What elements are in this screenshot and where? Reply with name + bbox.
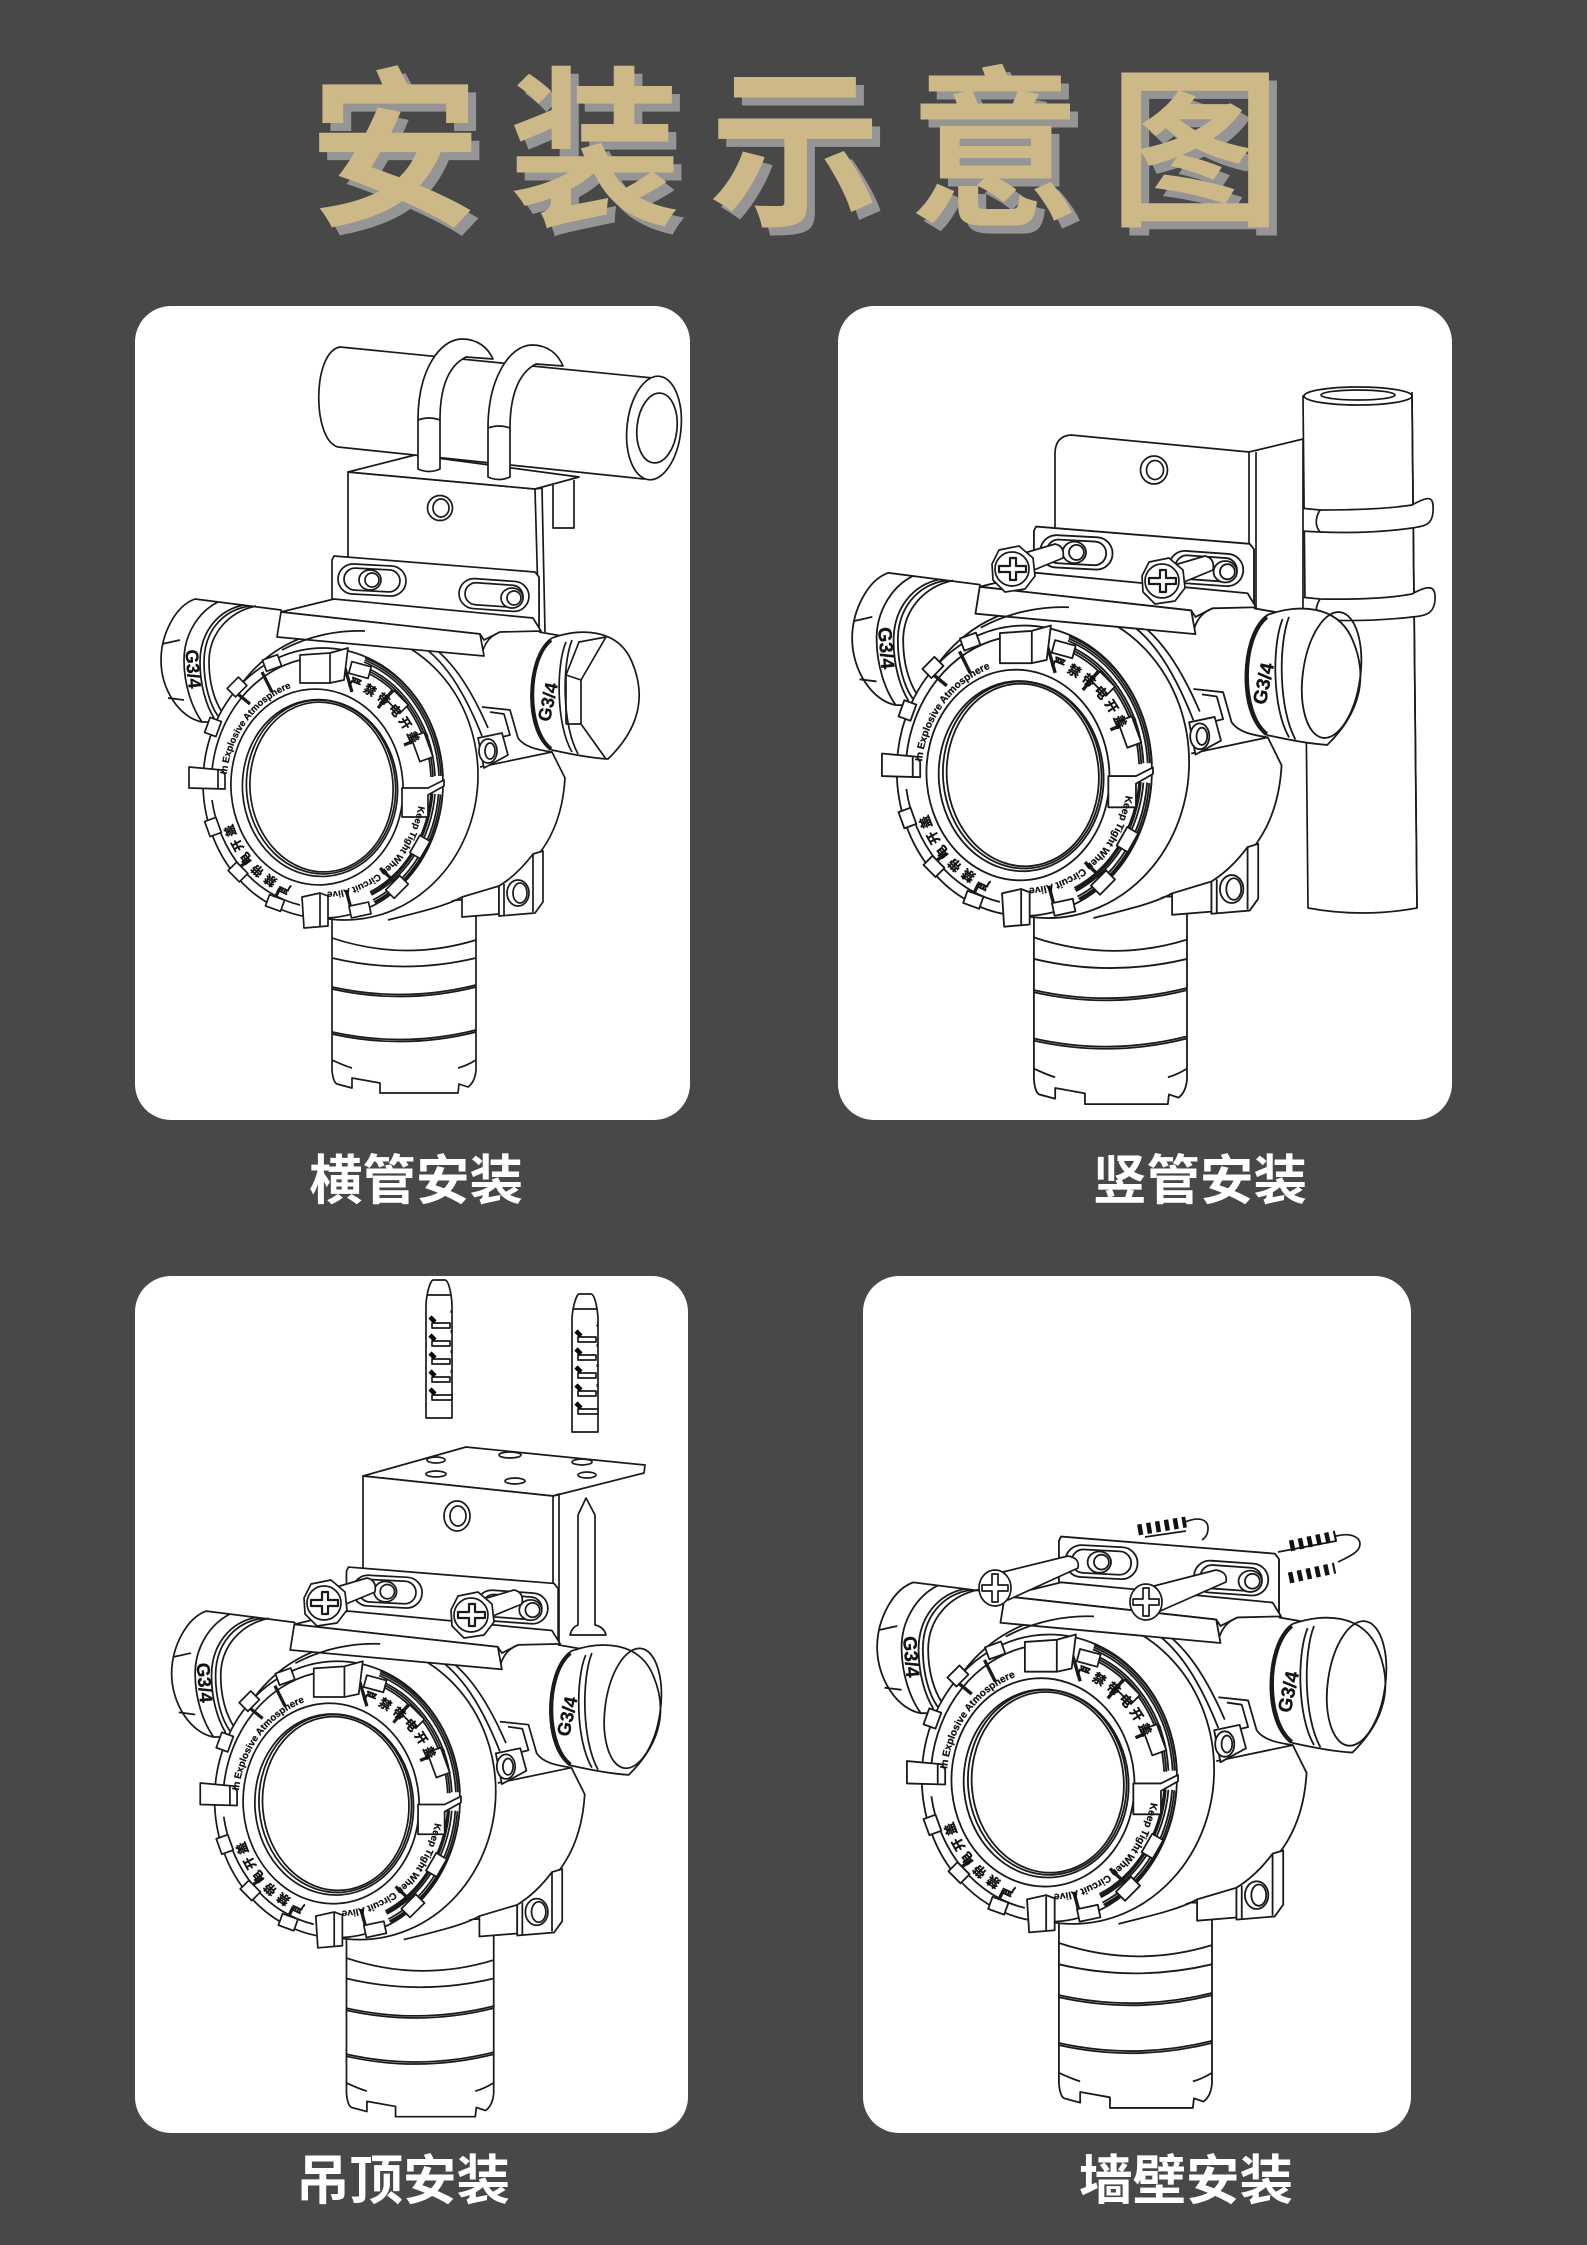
screw left: [304, 1578, 375, 1626]
screw left: [992, 544, 1063, 592]
thread labels: G3/4: [1275, 1669, 1304, 1715]
label: 竖管安装: 竖管安装: [1093, 1152, 1307, 1211]
panel: wall mounting: [863, 1276, 1411, 2133]
panel background: [838, 306, 1452, 1120]
ceiling bracket: [363, 1447, 645, 1660]
ring markings: 严禁带电开盖: [1076, 1664, 1152, 1738]
right cap end face: [1319, 1617, 1394, 1750]
detector body: [170, 1566, 662, 2118]
ring markings: Keep Tight When Circuit Alive: [1054, 1803, 1158, 1900]
detector body: [876, 1536, 1388, 2109]
label: 墙壁安装: 墙壁安装: [1079, 2152, 1293, 2211]
thread labels: G3/4: [873, 626, 897, 670]
bracket mounting hole: [428, 496, 452, 520]
panel: horizontal pipe mounting: [135, 306, 690, 1120]
panel background: [863, 1276, 1411, 2133]
label: 吊顶安装: 吊顶安装: [296, 2152, 510, 2211]
horizontal pipe with U-bolts: [319, 339, 686, 483]
ring markings: Keep Tight When Circuit Alive: [1029, 796, 1133, 894]
thread labels: G3/4: [534, 681, 562, 723]
anchor right of plate: [1278, 1535, 1360, 1578]
screw right: [1142, 556, 1213, 604]
wall anchor left: [426, 1280, 452, 1418]
thread labels: G3/4: [193, 1662, 217, 1704]
wall anchor right: [572, 1294, 598, 1432]
U-bolts around pipe: [1272, 499, 1435, 621]
ring markings: 严禁带电开盖: [348, 676, 420, 744]
long screw right: [1130, 1570, 1226, 1620]
ring markings: [220, 676, 425, 898]
ring markings: In Explosive Atmosphere: [940, 1672, 1015, 1768]
thread labels: G3/4: [898, 1635, 923, 1679]
thread labels: [181, 649, 562, 723]
title: 安装示意图: 安装示意图: [317, 65, 1317, 257]
title: 安装示意图: 安装示意图: [309, 57, 1309, 249]
label: 横管安装: 横管安装: [309, 1152, 523, 1211]
ring markings: 严禁带电开盖: [1051, 656, 1128, 730]
anchor behind plate: [1138, 1519, 1208, 1540]
panel background: [135, 306, 690, 1120]
long self-tapping screw: [570, 1498, 606, 1635]
thread labels: G3/4: [1250, 661, 1279, 707]
ring markings: [915, 656, 1133, 894]
bracket: face, top lip and peg: [348, 455, 579, 632]
detector body: [851, 526, 1362, 1105]
thread labels: G3/4: [553, 1694, 582, 1738]
ring markings: In Explosive Atmosphere: [220, 684, 290, 774]
screw right: [451, 1590, 522, 1638]
right cap end face: [597, 1645, 669, 1772]
ring markings: [232, 1690, 442, 1917]
panel: ceiling mounting: [135, 1276, 688, 2133]
thread labels: [193, 1662, 582, 1738]
ring markings: In Explosive Atmosphere: [232, 1698, 304, 1790]
right cap end face: [1294, 608, 1369, 742]
hex plug on right cap: [566, 637, 606, 759]
vertical pipe: [1303, 387, 1417, 913]
thread labels: [898, 1635, 1304, 1715]
ring markings: 严禁带电开盖: [236, 1841, 306, 1914]
thread labels: [873, 626, 1279, 707]
panel background: [135, 1276, 688, 2133]
wall bracket plate: [1055, 435, 1303, 620]
long screw left: [979, 1556, 1078, 1606]
ring markings: 严禁带电开盖: [944, 1821, 1016, 1898]
ring markings: Keep Tight When Circuit Alive: [327, 806, 425, 898]
thread labels: G3/4: [181, 649, 205, 689]
detector body: [161, 556, 639, 1093]
ring markings: [940, 1664, 1158, 1900]
panel: vertical pipe mounting: [838, 306, 1452, 1120]
ring markings: In Explosive Atmosphere: [915, 664, 990, 761]
ring markings: Keep Tight When Circuit Alive: [342, 1823, 442, 1917]
ring markings: 严禁带电开盖: [224, 824, 292, 896]
ring markings: 严禁带电开盖: [918, 814, 992, 892]
ring markings: 严禁带电开盖: [363, 1690, 436, 1760]
